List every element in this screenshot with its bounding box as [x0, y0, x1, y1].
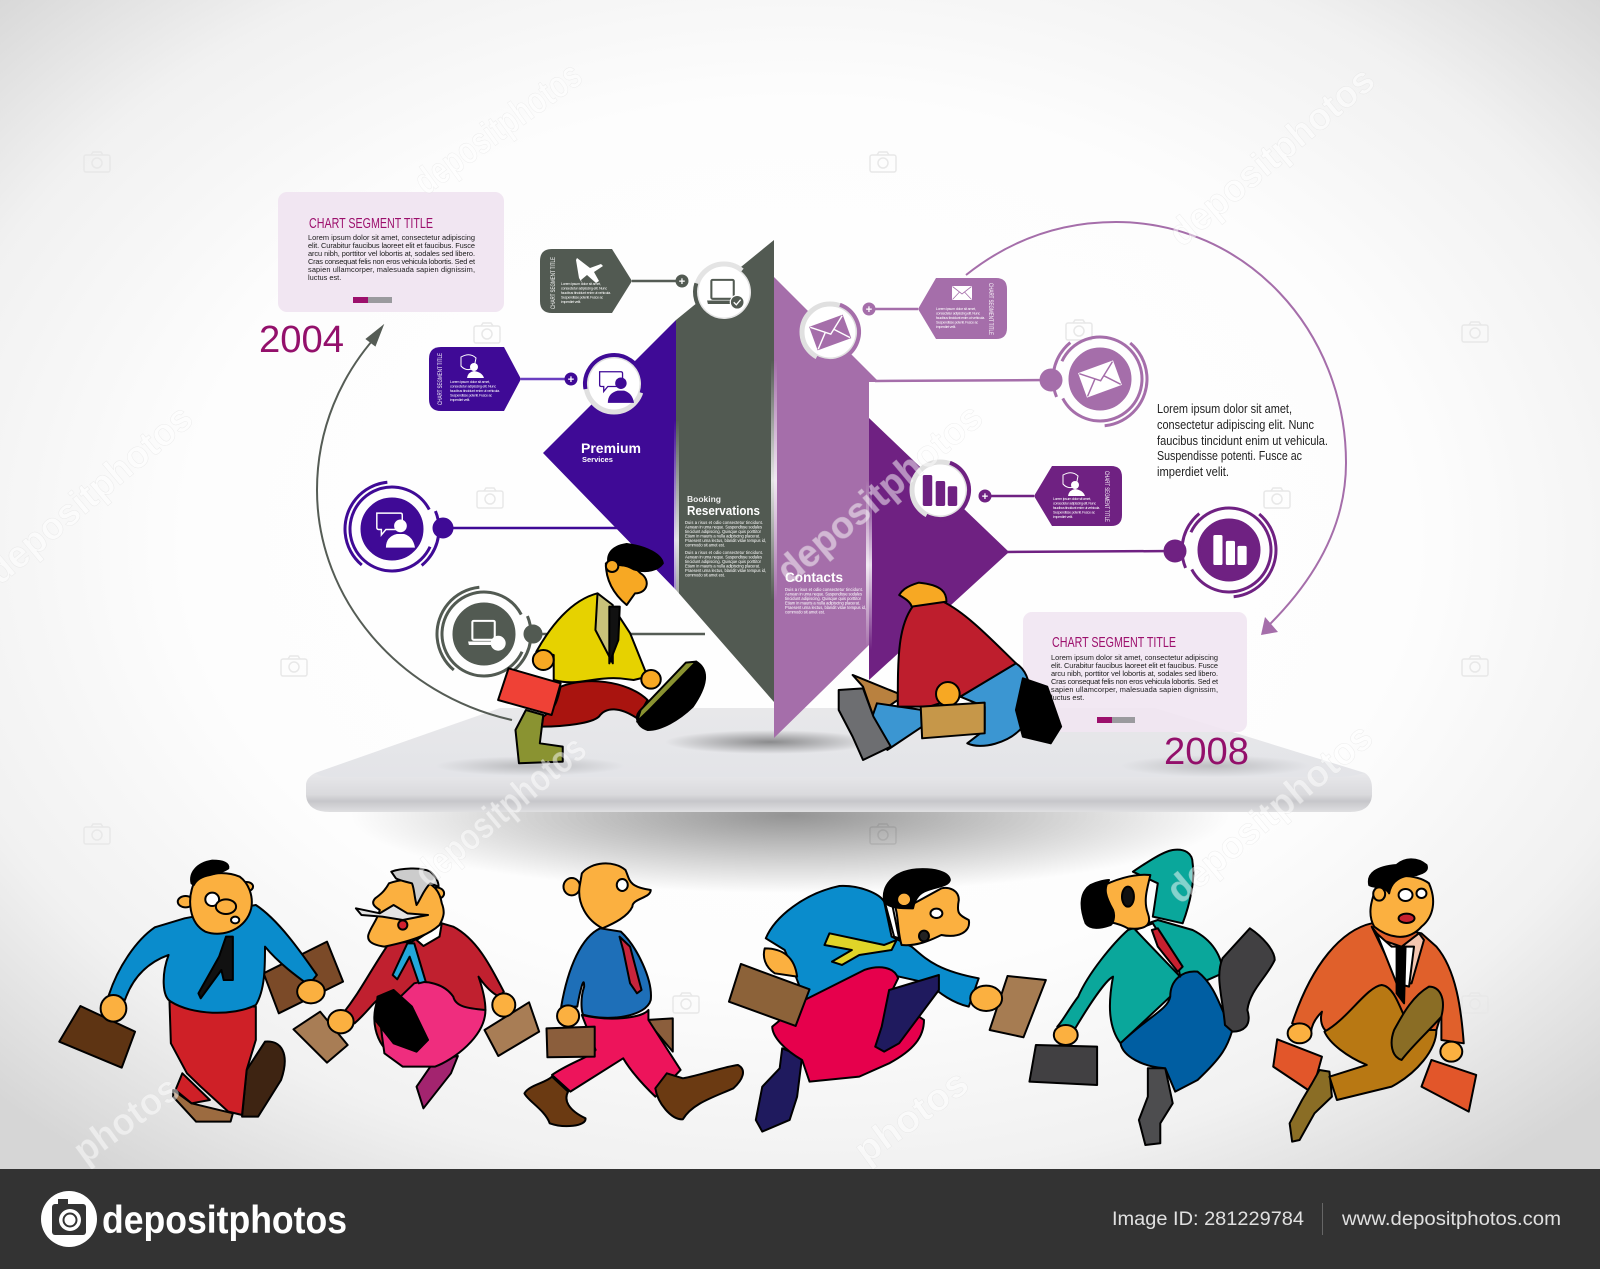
icon: envelope badge: [793, 295, 867, 369]
box text: elit. Curabitur faucibus laoreet elit et faucibus. Fusce: [1051, 661, 1218, 670]
body text: contacts: Praesent urna lectus, blandit vitae tempus id,: [785, 605, 866, 610]
box text: [308, 233, 475, 282]
tag text: Suspendisse potenti. Fusce ac: [936, 320, 978, 324]
depositphotos watermarks: depositphotos: [1161, 59, 1383, 255]
tag text: Lorem ipsum dolor sit amet,: [936, 307, 976, 311]
platform shelf: [306, 708, 1372, 812]
box text: [1051, 653, 1218, 702]
body text: right column: Lorem ipsum dolor sit amet,: [1157, 402, 1292, 416]
tag text: consectetur adipiscing elit. Nunc: [1053, 502, 1096, 506]
logo wordmark: depositphotos: [102, 1199, 347, 1242]
tag text: Lorem ipsum dolor sit amet,: [561, 282, 601, 286]
heading: contacts: Contacts: [785, 569, 843, 585]
body text: booking: Praesent urna lectus, blandit vitae tempus id,: [685, 568, 766, 573]
tag text: Lorem ipsum dolor sit amet,: [1053, 497, 1091, 501]
body text: right column: faucibus tincidunt enim ut vehicula.: [1157, 434, 1328, 448]
cartoon: old man with moustache: [293, 869, 539, 1108]
box text: Cras consequat felis non eros vehicula lobortis. Sed et: [1051, 677, 1218, 686]
plus nodes: +: [679, 276, 685, 288]
body text: contacts: Aenean in urna neque. Suspendisse sodales: [785, 592, 862, 596]
icon: bars badge: [903, 453, 977, 527]
depositphotos watermarks: depositphotos: [1159, 716, 1381, 912]
icon: airplane: [576, 258, 603, 283]
icon: headset person: [1063, 473, 1085, 496]
tag text: Suspendisse potenti. Fusce ac: [561, 296, 603, 300]
body text: booking: Aenean in urna neque. Suspendisse sodales: [685, 554, 762, 560]
body text: booking: [685, 520, 766, 578]
box text: sapien ullamcorper, malesuada sapien dignissim,: [1051, 685, 1218, 694]
website url: www.depositphotos.com: [1341, 1209, 1561, 1230]
body text: contacts: Duis a risus et odio consectetur tincidunt.: [785, 587, 863, 592]
tag text: [561, 282, 611, 304]
ring: envelope: [1034, 313, 1166, 445]
tag text: [1053, 497, 1100, 519]
icon: laptop badge: [683, 251, 765, 333]
heading: booking: Booking: [687, 494, 721, 504]
ring: laptop grey: [418, 568, 550, 700]
tag text: faucibus tincidunt enim ut vehicula.: [450, 389, 500, 393]
box text: sapien ullamcorper, malesuada sapien dignissim,: [308, 265, 475, 274]
rotated title: CHART SEGMENT TITLE: [551, 257, 557, 309]
year: 2004: 2004: [259, 319, 344, 361]
cartoon: red jacket man: [839, 583, 1061, 760]
cartoon: bald man walking: [524, 863, 743, 1126]
callout: 2004 box: [278, 192, 504, 312]
box text: luctus est.: [308, 273, 341, 282]
box text: luctus est.: [1051, 693, 1084, 702]
rotated title: CHART SEGMENT TITLE: [438, 353, 444, 405]
tag text: faucibus tincidunt enim ut vehicula.: [1053, 506, 1100, 510]
image id: Image ID: 281229784: [1112, 1209, 1304, 1230]
depositphotos watermarks: depositphotos: [407, 54, 590, 203]
footer bar: [0, 1169, 1600, 1269]
ring: bars: [1163, 484, 1295, 616]
body text: booking: tincidunt adipiscing. Quisque quis porttitor: [685, 529, 762, 534]
timeline arc: 2008: [966, 222, 1346, 635]
body text: right column: imperdiet velit.: [1157, 465, 1229, 479]
rotated title: CHART SEGMENT TITLE: [1103, 471, 1109, 522]
ring: person indigo: [326, 463, 458, 595]
tag text: imperdiet velit.: [1053, 515, 1073, 519]
tag: support purple: [1034, 466, 1122, 526]
tag text: faucibus tincidunt enim ut vehicula.: [561, 291, 611, 295]
cartoon: running man with yellow tie: [729, 869, 1046, 1132]
tag text: Suspendisse potenti. Fusce ac: [1053, 510, 1095, 514]
panel: contacts: [774, 277, 879, 738]
tag text: Lorem ipsum dolor sit amet,: [450, 380, 490, 384]
tag text: imperdiet velit.: [936, 325, 956, 329]
cartoon: teal sweater man looking up: [1029, 850, 1275, 1145]
box title: CHART SEGMENT TITLE: [309, 215, 433, 232]
body text: booking: Etiam in mauris a nulla adipiscing placerat.: [685, 534, 760, 538]
body text: booking: Duis a risus et odio consectetur tincidunt.: [685, 550, 763, 555]
box title: CHART SEGMENT TITLE: [1052, 634, 1176, 651]
tag: airplane: [540, 249, 632, 313]
tag text: consectetur adipiscing elit. Nunc: [936, 312, 980, 316]
body text: right column: consectetur adipiscing elit. Nunc: [1157, 418, 1314, 432]
progress bar: [353, 297, 392, 303]
depositphotos watermarks: depositphotos: [769, 396, 991, 592]
tag text: Suspendisse potenti. Fusce ac: [450, 394, 492, 398]
box text: Lorem ipsum dolor sit amet, consectetur adipiscing: [1051, 653, 1218, 662]
tag text: [936, 307, 985, 329]
progress bar: [1097, 717, 1135, 723]
panel edge highlights: [674, 360, 872, 660]
depositphotos watermarks: [0, 54, 1383, 1172]
panel: premium services triangle: [543, 320, 676, 590]
cartoon: blue shirt man with red trousers: [59, 861, 343, 1122]
logo: camera: [41, 1191, 97, 1247]
body text: contacts: [785, 587, 866, 614]
body text: contacts: Etiam in mauris a nulla adipiscing placerat.: [785, 600, 860, 606]
body text: booking: Aenean in urna neque. Suspendisse sodales: [685, 524, 762, 530]
plus nodes: +: [568, 374, 574, 386]
callout: 2008 box: [1023, 612, 1247, 732]
body text: booking: commodo sit amet est.: [685, 542, 725, 548]
heading: reservations: Reservations: [687, 504, 760, 518]
box text: Lorem ipsum dolor sit amet, consectetur adipiscing: [308, 233, 475, 242]
timeline arc: 2004: [317, 327, 512, 720]
connector lines: [443, 281, 1175, 634]
tag text: imperdiet velit.: [450, 398, 470, 402]
tag text: consectetur adipiscing elit. Nunc: [450, 384, 496, 388]
tag: support indigo: [429, 347, 521, 411]
body text: booking: Duis a risus et odio consectetur tincidunt.: [685, 520, 763, 525]
year: 2008: 2008: [1164, 731, 1249, 773]
body text: right column: [1157, 402, 1328, 479]
box text: arcu nibh, porttitor vel lobortis at, sodales sed libero.: [308, 249, 475, 258]
icon: envelope: [952, 286, 972, 300]
body text: contacts: tincidunt adipiscing. Quisque quis porttitor: [785, 596, 862, 601]
under-platform shadow: [350, 737, 1230, 893]
icon: person badge: [580, 350, 648, 418]
depositphotos watermarks: photos: [847, 1062, 976, 1172]
box text: elit. Curabitur faucibus laoreet elit et faucibus. Fusce: [308, 241, 475, 250]
tag text: imperdiet velit.: [561, 300, 581, 304]
cartoon: orange suit man: [1273, 859, 1476, 1142]
body text: booking: tincidunt adipiscing. Quisque quis porttitor: [685, 559, 762, 564]
box text: arcu nibh, porttitor vel lobortis at, sodales sed libero.: [1051, 669, 1218, 678]
body text: right column: Suspendisse potenti. Fusce ac: [1157, 449, 1302, 463]
icon: headset person: [461, 355, 484, 378]
tag text: faucibus tincidunt enim ut vehicula.: [936, 316, 985, 320]
plus nodes: [564, 274, 992, 503]
depositphotos watermarks: photos: [66, 1068, 187, 1172]
tag text: [450, 380, 500, 402]
depositphotos watermarks: depositphotos: [407, 728, 595, 895]
body text: booking: Praesent urna lectus, blandit vitae tempus id,: [685, 538, 766, 543]
heading: premium: Premium: [581, 440, 641, 456]
panel: booking reservations: [676, 240, 774, 702]
tag text: consectetur adipiscing elit. Nunc: [561, 286, 607, 290]
plus nodes: +: [982, 491, 988, 503]
plus nodes: +: [866, 304, 872, 316]
body text: booking: Etiam in mauris a nulla adipiscing placerat.: [685, 564, 760, 568]
camera watermark icons: [84, 152, 1488, 1013]
tag: mail: [918, 278, 1007, 339]
heading: services: Services: [582, 455, 613, 464]
rotated title: CHART SEGMENT TITLE: [987, 283, 993, 335]
panel: dark purple triangle: [869, 418, 1009, 680]
cartoon: yellow jacket man: [498, 544, 705, 763]
box text: Cras consequat felis non eros vehicula lobortis. Sed et: [308, 257, 475, 266]
body text: contacts: commodo sit amet est.: [785, 610, 825, 614]
body text: booking: commodo sit amet est.: [685, 572, 725, 578]
